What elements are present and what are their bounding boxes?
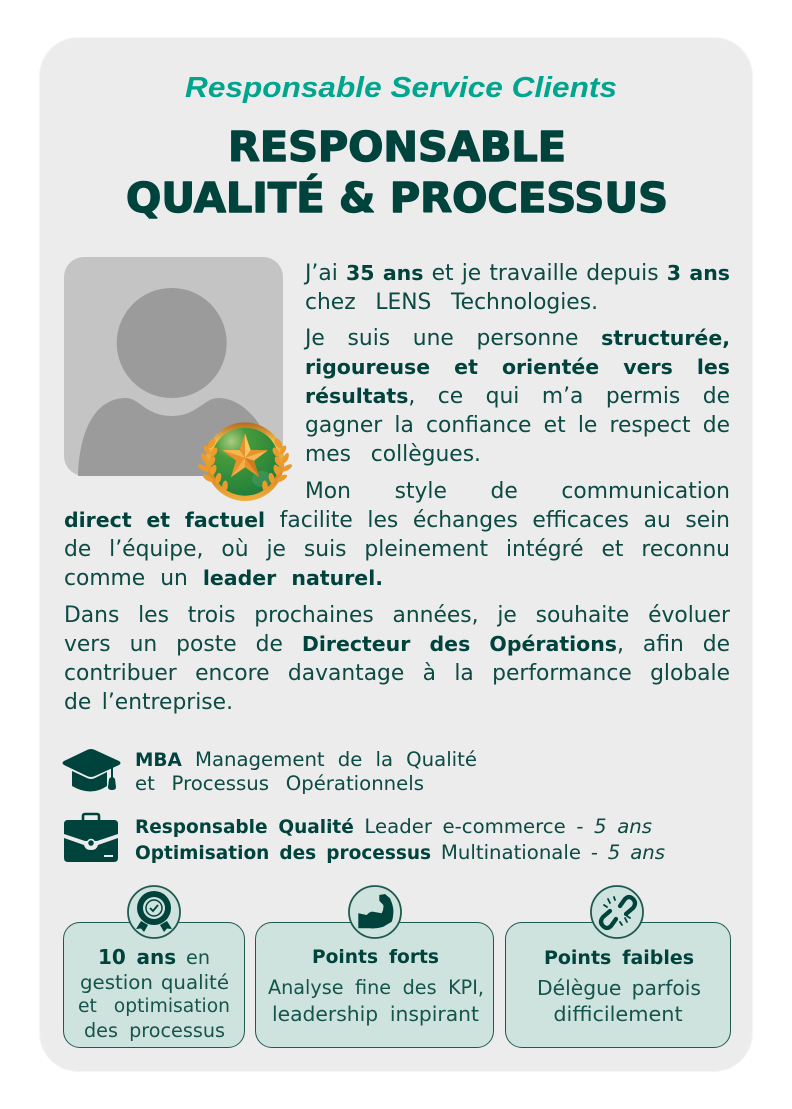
text: strengths: Points forts xyxy=(312,947,439,968)
text: strengths: leadership inspirant xyxy=(272,1002,479,1026)
paragraph: personality: gagner la confiance et le respect de xyxy=(305,413,730,438)
text: years of experience: 10 ans en xyxy=(98,945,210,969)
title: RESPONSABLE xyxy=(228,123,566,171)
text: weaknesses: difficilement xyxy=(553,1002,683,1026)
text: years of experience: et optimisation xyxy=(78,996,230,1017)
paragraph: ambition: contribuer encore davantage à la performance globale xyxy=(64,661,730,686)
paragraph: personality: Je suis une personne structurée, xyxy=(305,326,730,351)
text: years of experience: gestion qualité xyxy=(80,971,229,994)
paragraph: age and tenure xyxy=(304,261,730,315)
icon: briefcase xyxy=(64,812,118,862)
paragraph: communication: direct et factuel facilite les échanges efficaces au sein xyxy=(64,508,730,533)
text: experience: Responsable Qualité Leader e-commerce - 5 ans xyxy=(135,815,652,838)
text: education: MBA Management de la Qualité xyxy=(135,748,477,771)
text: weaknesses: Délègue parfois xyxy=(537,976,701,1000)
paragraph: age and tenure: J’ai 35 ans et je travaille depuis 3 ans xyxy=(305,261,730,286)
text: education: et Processus Opérationnels xyxy=(135,772,424,795)
text: experience xyxy=(135,815,665,864)
icon: medal with star xyxy=(198,422,292,501)
text: weaknesses xyxy=(537,947,701,1026)
paragraph: personality xyxy=(304,326,730,467)
paragraph: communication: Mon style de communication xyxy=(305,479,730,504)
paragraph: ambition: Dans les trois prochaines années, je souhaite évoluer xyxy=(64,603,730,628)
paragraph: ambition: vers un poste de Directeur des Opérations, afin de xyxy=(64,632,730,657)
icon: flexed muscle xyxy=(348,885,402,939)
subtitle: Responsable Service Clients xyxy=(185,72,617,104)
paragraph: communication: de l’équipe, où je suis pleinement intégré et reconnu xyxy=(64,537,730,562)
panel: weaknesses box xyxy=(505,922,731,1048)
icon: graduation cap xyxy=(62,749,120,792)
paragraph: personality: mes collègues. xyxy=(305,442,481,467)
title xyxy=(126,123,668,222)
title: QUALITÉ & PROCESSUS xyxy=(126,174,668,222)
paragraph: communication: comme un leader naturel. xyxy=(64,566,383,591)
text: weaknesses: Points faibles xyxy=(544,947,694,969)
panel: experience box xyxy=(63,922,245,1048)
text: experience: Optimisation des processus Multinationale - 5 ans xyxy=(135,841,665,864)
panel: strengths box xyxy=(255,922,494,1048)
photo placeholder xyxy=(64,257,283,476)
paragraph: personality: résultats, ce qui m’a permis de xyxy=(305,384,730,409)
text: strengths xyxy=(268,947,484,1026)
text: years of experience xyxy=(78,945,230,1042)
paragraph: communication xyxy=(64,479,730,591)
paragraph: ambition xyxy=(64,603,730,715)
paragraph: ambition: de l’entreprise. xyxy=(64,690,233,715)
text: strengths: Analyse fine des KPI, xyxy=(268,976,484,999)
icon: rosette badge xyxy=(127,885,181,939)
icon: broken chain link xyxy=(590,885,644,939)
text: years of experience: des processus xyxy=(84,1019,225,1042)
text: education xyxy=(135,748,477,795)
paragraph: personality: rigoureuse et orientée vers les xyxy=(305,355,730,379)
paragraph: age and tenure: chez LENS Technologies. xyxy=(305,290,598,315)
